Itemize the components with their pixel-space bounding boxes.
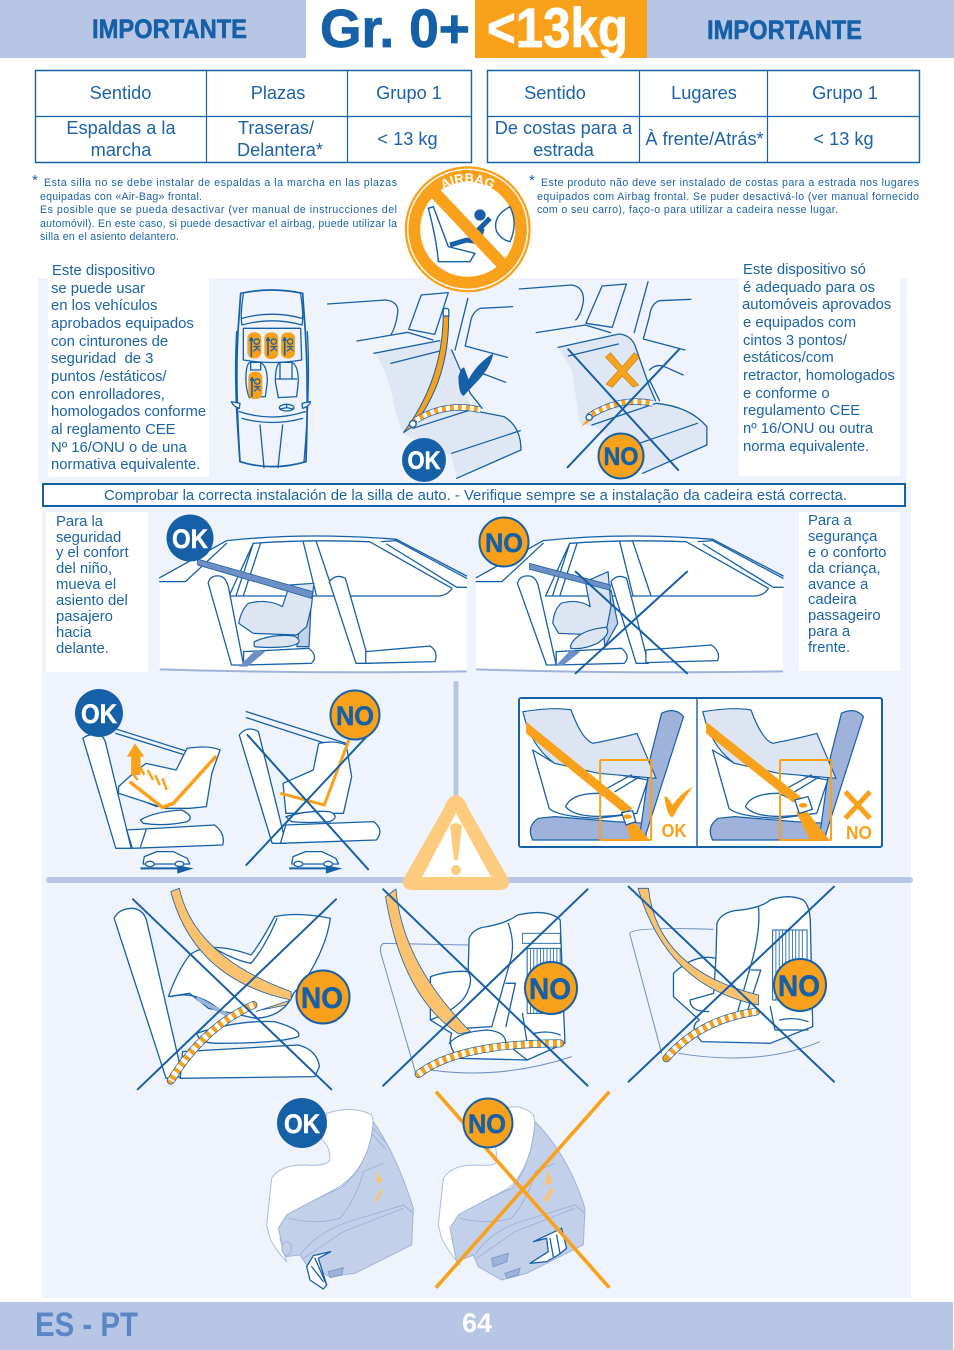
footer: language code: ES - PT xyxy=(35,1306,138,1344)
icon: warning triangle xyxy=(403,795,509,890)
badge: OK belt xyxy=(402,438,446,482)
title: group: Gr. 0+ xyxy=(320,0,470,59)
panel: lower pale background xyxy=(42,484,911,1298)
table: Spanish: Plazas xyxy=(251,83,305,103)
badge: OK belt routing: OK xyxy=(81,699,117,729)
badge: OK carrier: OK xyxy=(284,1109,320,1139)
footnote: Spanish airbag warning: equipadas con «Air-Bag» frontal. xyxy=(40,191,202,203)
table: Portuguese: Grupo 1 xyxy=(812,83,878,103)
footnote: Spanish airbag warning xyxy=(32,172,397,243)
text block: Spanish device conditions: normativa equivalente. xyxy=(51,457,200,473)
text block: Spanish device conditions: Este dispositivo xyxy=(52,263,155,279)
panel: Spanish passenger seat text: delante. xyxy=(56,641,109,657)
text block: Portuguese device conditions: regulamento CEE xyxy=(743,403,860,419)
footnote: Spanish airbag warning: * xyxy=(32,172,38,189)
illustration: carrier with wrong clip, NO xyxy=(436,1092,609,1288)
panel: Portuguese passenger seat text: passageiro xyxy=(808,608,881,624)
text block: Portuguese device conditions xyxy=(742,262,895,455)
table: Portuguese: À frente/Atrás* xyxy=(645,129,764,149)
badge: NO belt: NO xyxy=(604,443,638,471)
icon: car top view with OK seats: OK xyxy=(250,338,262,352)
footer band xyxy=(0,1302,953,1350)
illustration: NO position 2 xyxy=(380,889,588,1086)
illustration: front seat too far back, NO xyxy=(476,536,783,673)
panel: Portuguese passenger seat text: cadeira xyxy=(808,592,857,608)
panel: Spanish passenger seat text: mueva el xyxy=(56,577,116,593)
footnote: Spanish airbag warning: Es posible que se pueda desactivar (ver manual de instrucciones del xyxy=(40,204,397,216)
text block: Portuguese device conditions: e conforme o xyxy=(743,386,830,402)
text block: Portuguese device conditions: estáticos/com xyxy=(743,350,834,366)
banner: check installation xyxy=(43,484,905,506)
divider: horizontal xyxy=(46,877,913,883)
text block: Spanish device conditions: aprobados equipados xyxy=(51,316,194,332)
footer: page number: 64 xyxy=(462,1308,492,1338)
text block: Spanish device conditions: homologados conforme xyxy=(51,404,206,420)
panel: Portuguese passenger seat text: e o conforto xyxy=(808,545,886,561)
badge: NO carrier xyxy=(464,1098,512,1148)
badge: NO position 1 xyxy=(296,970,350,1024)
panel: Spanish passenger seat text: y el confort xyxy=(56,545,129,561)
panel: Spanish passenger seat text: pasajero xyxy=(56,609,113,625)
icon: car top view with OK seats: OK xyxy=(284,338,295,352)
badge: NO position 1: NO xyxy=(301,982,343,1015)
badge: NO carrier: NO xyxy=(468,1109,506,1139)
text block: Portuguese device conditions: nº 16/ONU ou outra xyxy=(743,421,874,437)
badge: NO belt routing: NO xyxy=(336,701,374,731)
badge: NO belt xyxy=(598,434,644,478)
text block: Portuguese device conditions: e equipados com xyxy=(743,315,856,331)
panel: Portuguese passenger seat text: frente. xyxy=(808,640,850,656)
icon: car top view with OK seats: OK xyxy=(251,378,262,392)
text block: Portuguese device conditions: cintos 3 pontos/ xyxy=(743,333,848,349)
badge: NO position 2 xyxy=(525,962,577,1014)
text block: Portuguese device conditions: Este dispositivo só xyxy=(743,262,866,278)
text block: Portuguese device conditions: é adequado para os xyxy=(743,280,875,296)
illustration: incorrect lap-only belt on car seat xyxy=(519,282,707,473)
footnote: Spanish airbag warning: Esta silla no se debe instalar de espaldas a la marcha en las plazas xyxy=(44,177,397,189)
badge: OK seat position: OK xyxy=(172,524,208,554)
panel: Spanish passenger seat text: asiento del xyxy=(56,593,128,609)
footnote: Portuguese airbag warning: com o seu carro), faço-o para utilizar a cadeira nesse lugar. xyxy=(537,204,838,216)
divider: vertical xyxy=(454,681,458,801)
table: Spanish: marcha xyxy=(91,140,152,160)
illustration: belt routed incorrectly, NO xyxy=(239,712,380,874)
illustration: correct 3-point belt on car seat xyxy=(328,293,521,478)
illustration: front seat moved forward, OK xyxy=(160,536,467,672)
footnote: Portuguese airbag warning: equipados com Airbag frontal. Se puder desactivá-lo (ver manual fornecido xyxy=(537,191,919,203)
badge: OK carrier xyxy=(277,1098,327,1148)
header band left xyxy=(0,0,306,58)
icon: airbag prohibition sign xyxy=(404,166,531,292)
text block: Portuguese device conditions: automóveis aprovados xyxy=(742,297,891,313)
panel: right text box xyxy=(739,278,900,476)
panel: Portuguese passenger seat text: para a xyxy=(808,624,851,640)
text block: Portuguese device conditions: norma equivalente. xyxy=(743,439,869,455)
illustration: belt passes correctly around carrier, OK xyxy=(83,729,223,874)
badge: OK seat position xyxy=(166,514,214,562)
panel: Spanish passenger seat text: seguridad xyxy=(56,530,121,546)
table: Portuguese xyxy=(487,70,920,162)
table: Spanish: Grupo 1 xyxy=(376,83,442,103)
text block: Spanish device conditions: con cinturones de xyxy=(51,334,168,350)
text block: Spanish device conditions: Nº 16/ONU o de una xyxy=(51,440,188,456)
framed panel: buckle position OK and NO: NO xyxy=(846,823,872,843)
table: Portuguese: estrada xyxy=(533,140,595,160)
illustration: NO position 1 xyxy=(114,888,336,1089)
panel: Spanish passenger seat text: Para la xyxy=(56,514,104,530)
table: Spanish xyxy=(35,70,472,162)
header band right xyxy=(647,0,954,58)
panel: Spanish passenger seat text: del niño, xyxy=(56,561,112,577)
badge: NO belt routing xyxy=(330,690,380,740)
heading: IMPORTANTE right: IMPORTANTE xyxy=(707,15,862,45)
illustration: NO position 3 xyxy=(629,887,834,1082)
panel: Spanish passenger seat text xyxy=(46,512,148,672)
panel: left text box xyxy=(48,278,209,477)
panel: Portuguese passenger seat text: Para a xyxy=(808,513,852,529)
badge: OK belt: OK xyxy=(408,447,440,475)
illustration: carrier with blue clip, OK xyxy=(267,1110,413,1289)
banner: check installation: Comprobar la correcta instalación de la silla de auto. - Verifique sempre se a instalação da cadeira está correcta. xyxy=(104,488,847,504)
framed panel: buckle position OK and NO: OK xyxy=(662,821,687,841)
text block: Spanish device conditions: en los vehículos xyxy=(51,298,157,314)
icon: car top view with OK seats xyxy=(231,290,311,468)
panel: Portuguese passenger seat text: avance a xyxy=(808,577,869,593)
table: Spanish: Traseras/ xyxy=(238,118,315,138)
footnote: Portuguese airbag warning xyxy=(529,172,919,216)
table: Spanish: Delantera* xyxy=(237,140,323,160)
text block: Portuguese device conditions: retractor, homologados xyxy=(743,368,895,384)
icon: car top view with OK seats: OK xyxy=(268,338,278,352)
text block: Spanish device conditions: seguridad de 3 xyxy=(51,351,153,367)
badge: NO seat position xyxy=(480,518,528,566)
text block: Spanish device conditions xyxy=(51,263,206,473)
heading: IMPORTANTE left: IMPORTANTE xyxy=(92,14,247,44)
table: Spanish: Sentido xyxy=(90,83,151,103)
text block: Spanish device conditions: con enrolladores, xyxy=(51,387,165,403)
table: Portuguese: Lugares xyxy=(671,83,737,103)
panel: Spanish passenger seat text: hacia xyxy=(56,625,92,641)
panel: upper pale background xyxy=(38,278,907,484)
footnote: Portuguese airbag warning: Este produto não deve ser instalado de costas para a estrada nos lugares xyxy=(541,177,919,189)
footnote: Portuguese airbag warning: * xyxy=(529,172,535,189)
panel: Portuguese passenger seat text: da criança, xyxy=(808,561,881,577)
footnote: Spanish airbag warning: silla en el asiento delantero. xyxy=(40,231,179,243)
table: Portuguese: Sentido xyxy=(524,83,586,103)
footnote: Spanish airbag warning: automóvil). En este caso, si puede desactivar el airbag, puede utilizar la xyxy=(40,218,397,230)
text block: Spanish device conditions: puntos /estáticos/ xyxy=(51,369,167,385)
text block: Spanish device conditions: se puede usar xyxy=(51,281,145,297)
table: Spanish: < 13 kg xyxy=(377,129,438,149)
table: Portuguese: < 13 kg xyxy=(813,129,874,149)
badge: OK belt routing xyxy=(75,689,123,737)
badge: NO seat position: NO xyxy=(485,528,523,558)
panel: Portuguese passenger seat text xyxy=(799,512,900,671)
text block: Spanish device conditions: al reglamento CEE xyxy=(51,422,176,438)
badge: NO position 3: NO xyxy=(778,970,820,1003)
icon: airbag prohibition sign: AIRBAG xyxy=(442,174,494,189)
panel: Portuguese passenger seat text: segurança xyxy=(808,529,878,545)
badge: NO position 3 xyxy=(774,959,826,1011)
badge: NO position 2: NO xyxy=(529,973,571,1006)
table: Portuguese: De costas para a xyxy=(495,118,633,138)
framed panel: buckle position OK and NO xyxy=(519,698,882,847)
table: Spanish: Espaldas a la xyxy=(66,118,176,138)
